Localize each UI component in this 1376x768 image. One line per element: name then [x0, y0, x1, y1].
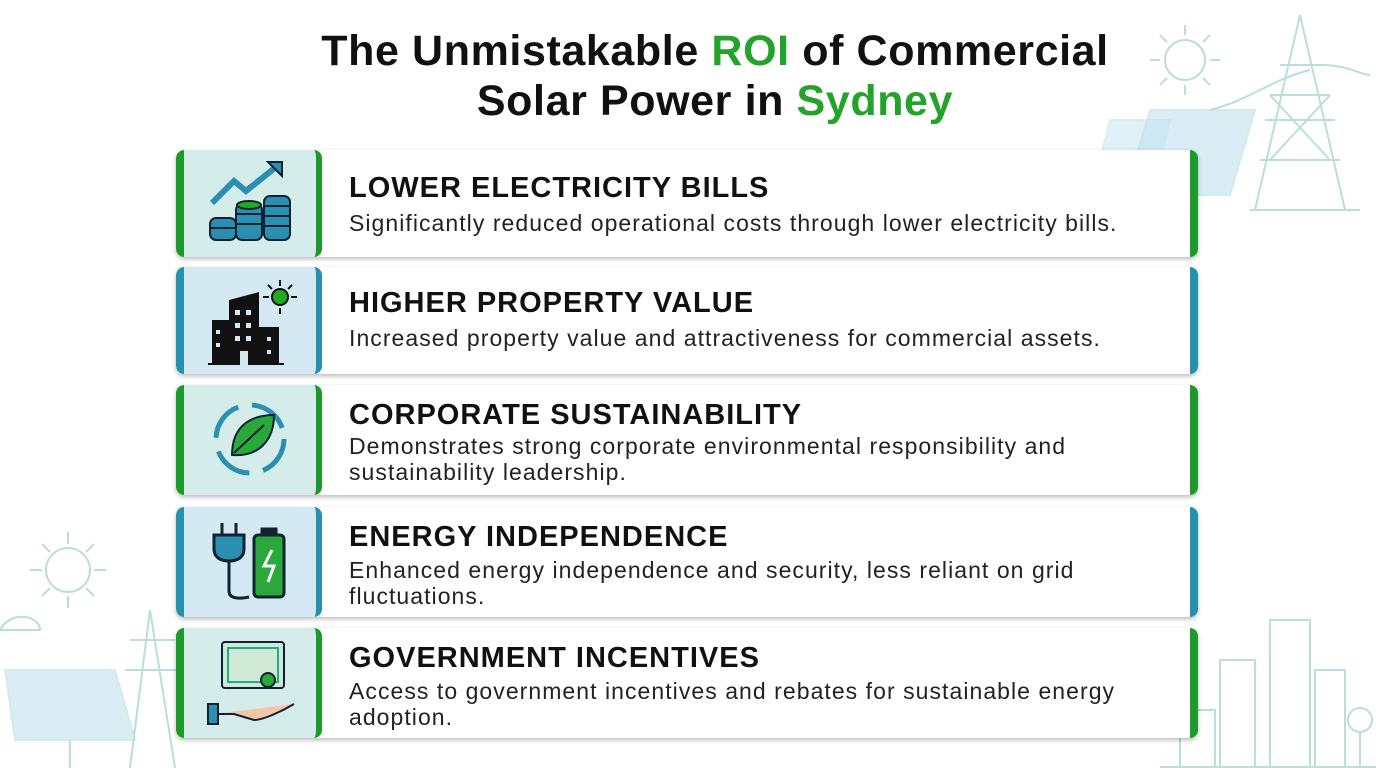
- text: Access to government incentives and rebates for sustainable energy: [349, 678, 1115, 704]
- heading: HIGHER PROPERTY VALUE: [349, 287, 754, 319]
- text: sustainability leadership.: [349, 459, 627, 485]
- title: The Unmistakable ROI of Commercial: [321, 27, 1109, 75]
- heading: LOWER ELECTRICITY BILLS: [349, 172, 769, 204]
- background decoration: bottom left solar: [0, 532, 176, 768]
- text: Enhanced energy independence and security, less reliant on grid: [349, 557, 1074, 583]
- text: Demonstrates strong corporate environmental responsibility and: [349, 433, 1066, 459]
- text: [349, 433, 1066, 485]
- icon: leaf with recycling arrows: [176, 385, 322, 495]
- icon: coins with rising arrow: [176, 150, 322, 257]
- icon: building with sun: [176, 267, 322, 374]
- heading: ENERGY INDEPENDENCE: [349, 521, 728, 553]
- heading: CORPORATE SUSTAINABILITY: [349, 399, 802, 431]
- text: fluctuations.: [349, 583, 485, 609]
- background decoration: top right solar and tower: [1102, 14, 1370, 211]
- panel: lower electricity bills: [176, 150, 1198, 257]
- title: [321, 27, 1109, 125]
- panel: energy independence: [176, 507, 1198, 617]
- panel: government incentives: [176, 628, 1198, 738]
- text: Significantly reduced operational costs through lower electricity bills.: [349, 210, 1118, 236]
- icon: certificate on hand: [176, 628, 322, 738]
- icon: plug and battery: [176, 507, 322, 617]
- text: [349, 678, 1115, 730]
- background decoration: bottom right city: [1160, 619, 1376, 768]
- text: Increased property value and attractiveness for commercial assets.: [349, 325, 1101, 351]
- panel: corporate sustainability: [176, 385, 1198, 495]
- text: [349, 557, 1074, 609]
- title: Solar Power in Sydney: [477, 77, 953, 125]
- panel: higher property value: [176, 267, 1198, 374]
- text: adoption.: [349, 704, 453, 730]
- heading: GOVERNMENT INCENTIVES: [349, 642, 760, 674]
